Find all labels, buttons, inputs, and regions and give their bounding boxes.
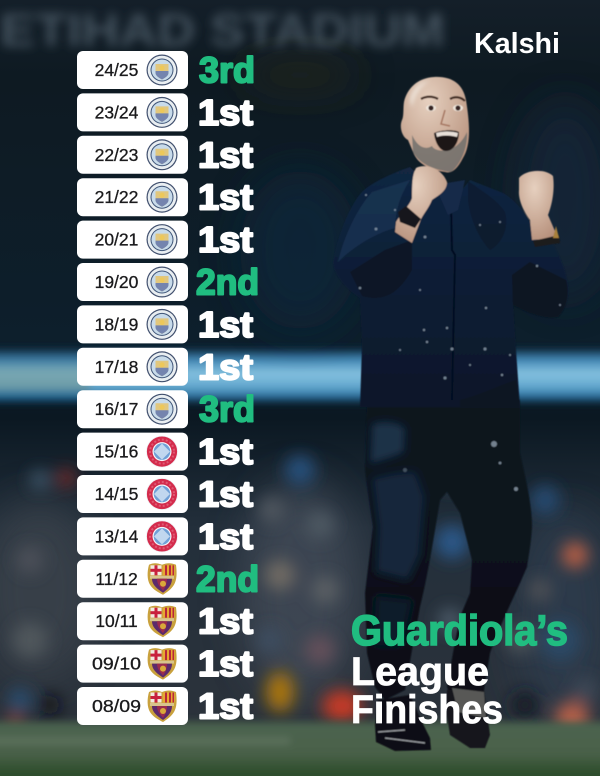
title line: Finishes: Finishes <box>351 688 503 732</box>
row 23/24: 1st <box>198 92 253 133</box>
row 18/19: 18/19 <box>95 314 138 334</box>
row 23/24: 23/24 <box>95 102 139 122</box>
row 11/12: 11/12 <box>95 569 138 589</box>
row 13/14: 1st <box>198 516 253 557</box>
row 14/15 <box>77 474 253 514</box>
row 13/14: 13/14 <box>95 526 139 546</box>
row 24/25: 24/25 <box>95 60 138 80</box>
row 16/17: 3rd <box>199 389 255 430</box>
blurred stadium sign: ETIHAD STADIUM <box>0 4 445 56</box>
row 21/22: 1st <box>198 177 253 218</box>
row 17/18: 17/18 <box>95 357 138 377</box>
row 18/19: 1st <box>198 304 253 345</box>
legs and trousers <box>365 400 532 700</box>
row 15/16: 1st <box>198 431 253 472</box>
row 11/12: 2nd <box>196 558 259 599</box>
Kalshi logo: Kalshi <box>474 28 560 60</box>
row 22/23 <box>77 134 253 175</box>
title line: Guardiola's: Guardiola’s <box>351 607 568 655</box>
bald highlight <box>410 80 430 108</box>
shoes <box>375 695 431 751</box>
row 08/09 <box>77 686 253 726</box>
row 21/22 <box>77 177 253 218</box>
row 17/18 <box>77 346 253 387</box>
row 10/11: 10/11 <box>95 611 138 631</box>
row 20/21 <box>77 219 253 260</box>
row 11/12 <box>77 558 259 599</box>
jacket shading <box>338 180 410 262</box>
row 21/22: 21/22 <box>95 187 138 207</box>
photo: celebrating manager <box>333 77 569 751</box>
beard <box>412 132 467 172</box>
row 14/15: 14/15 <box>95 484 138 504</box>
row 19/20: 2nd <box>196 262 259 302</box>
row 08/09: 1st <box>198 686 253 726</box>
row 24/25: 3rd <box>199 50 255 90</box>
row 14/15: 1st <box>198 474 253 514</box>
jacket <box>333 167 569 407</box>
pitch grass <box>0 722 600 776</box>
row 20/21: 20/21 <box>95 230 138 250</box>
season list <box>77 50 259 726</box>
row 23/24 <box>77 92 253 133</box>
row 15/16 <box>77 431 253 472</box>
water droplets <box>359 194 561 491</box>
left forearm and fist <box>395 166 447 243</box>
row 16/17: 16/17 <box>95 399 138 419</box>
row 09/10: 1st <box>198 643 253 684</box>
row 24/25 <box>77 50 255 90</box>
face features <box>434 130 459 151</box>
row 18/19 <box>77 304 253 345</box>
row 19/20: 19/20 <box>95 272 139 292</box>
row 10/11: 1st <box>198 601 253 642</box>
head <box>401 77 469 172</box>
row 09/10 <box>77 643 253 684</box>
shirt collar <box>435 180 465 215</box>
row 22/23: 1st <box>198 134 253 175</box>
right forearm and fist <box>519 171 558 240</box>
row 10/11 <box>77 601 253 642</box>
row 22/23: 22/23 <box>95 145 138 165</box>
floodlight band <box>0 349 600 403</box>
trouser highlights and cargo pocket <box>370 422 425 645</box>
row 13/14 <box>77 516 253 557</box>
row 09/10: 09/10 <box>92 654 141 674</box>
row 08/09: 08/09 <box>92 696 141 716</box>
row 16/17 <box>77 389 255 430</box>
row 20/21: 1st <box>198 219 253 260</box>
row 15/16: 15/16 <box>95 442 138 462</box>
row 17/18: 1st <box>198 346 253 387</box>
row 19/20 <box>77 262 259 302</box>
title: Guardiola's League Finishes <box>351 607 568 732</box>
title line: League: League <box>351 650 489 694</box>
